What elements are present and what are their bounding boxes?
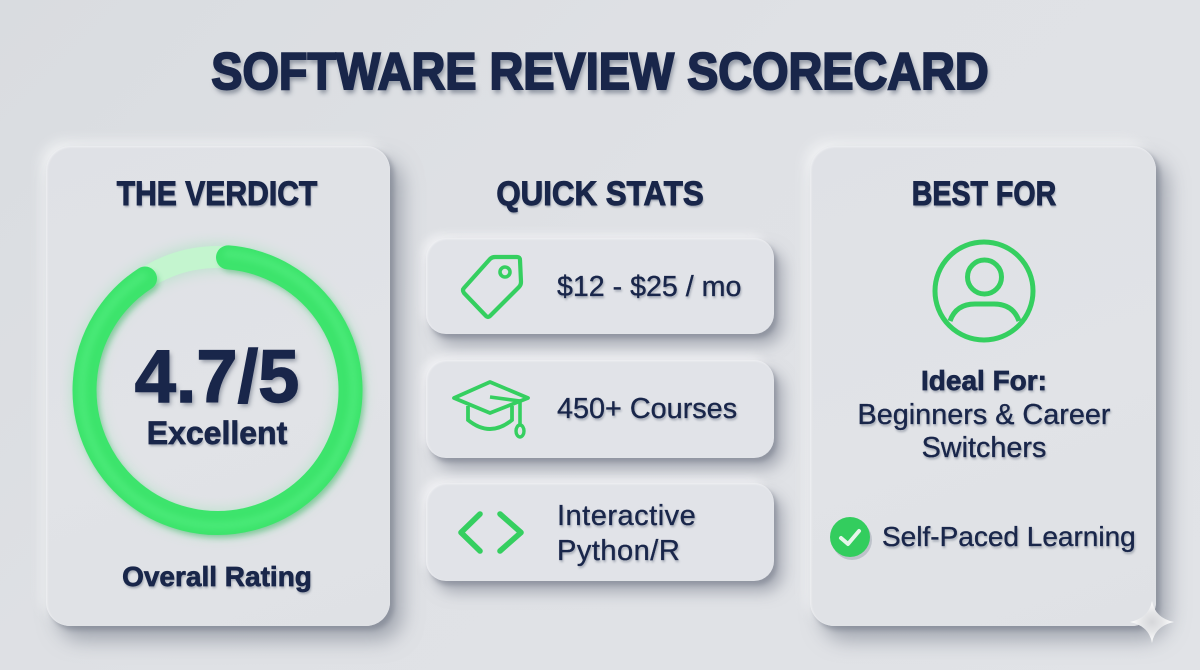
ideal for text: Ideal For: xyxy=(921,365,1047,396)
overall rating caption: Overall Rating xyxy=(122,561,312,592)
interactive text: Python/R xyxy=(557,534,680,566)
interactive text: Interactive xyxy=(557,500,696,532)
price text: $12 - $25 / mo xyxy=(557,271,741,303)
title: SOFTWARE REVIEW SCORECARD xyxy=(211,43,989,101)
icon: user xyxy=(932,240,1036,342)
ideal for text xyxy=(858,365,1112,464)
icon: graduation cap xyxy=(452,380,530,439)
panel: price xyxy=(426,238,774,334)
interactive text xyxy=(557,500,696,569)
panel: courses xyxy=(426,360,774,458)
score: 4.7/5 xyxy=(135,335,299,418)
ideal for text: Beginners & Career xyxy=(858,398,1110,430)
icon: code brackets xyxy=(458,511,524,554)
panel: the verdict xyxy=(46,146,390,626)
icon: price tag xyxy=(460,254,524,320)
heading: best for: BEST FOR xyxy=(912,175,1056,213)
icon: check badge xyxy=(830,517,872,560)
panel: interactive xyxy=(426,483,774,581)
heading: the verdict: THE VERDICT xyxy=(117,175,317,213)
heading: quick stats: QUICK STATS xyxy=(496,175,704,213)
chart: rating ring xyxy=(66,239,370,543)
self-paced text: Self-Paced Learning xyxy=(882,521,1136,552)
icon: sparkle xyxy=(1130,602,1174,642)
panel: best for xyxy=(810,146,1156,626)
ideal for text: Switchers xyxy=(922,432,1046,464)
rating label: Excellent xyxy=(147,415,287,451)
courses text: 450+ Courses xyxy=(557,393,737,425)
